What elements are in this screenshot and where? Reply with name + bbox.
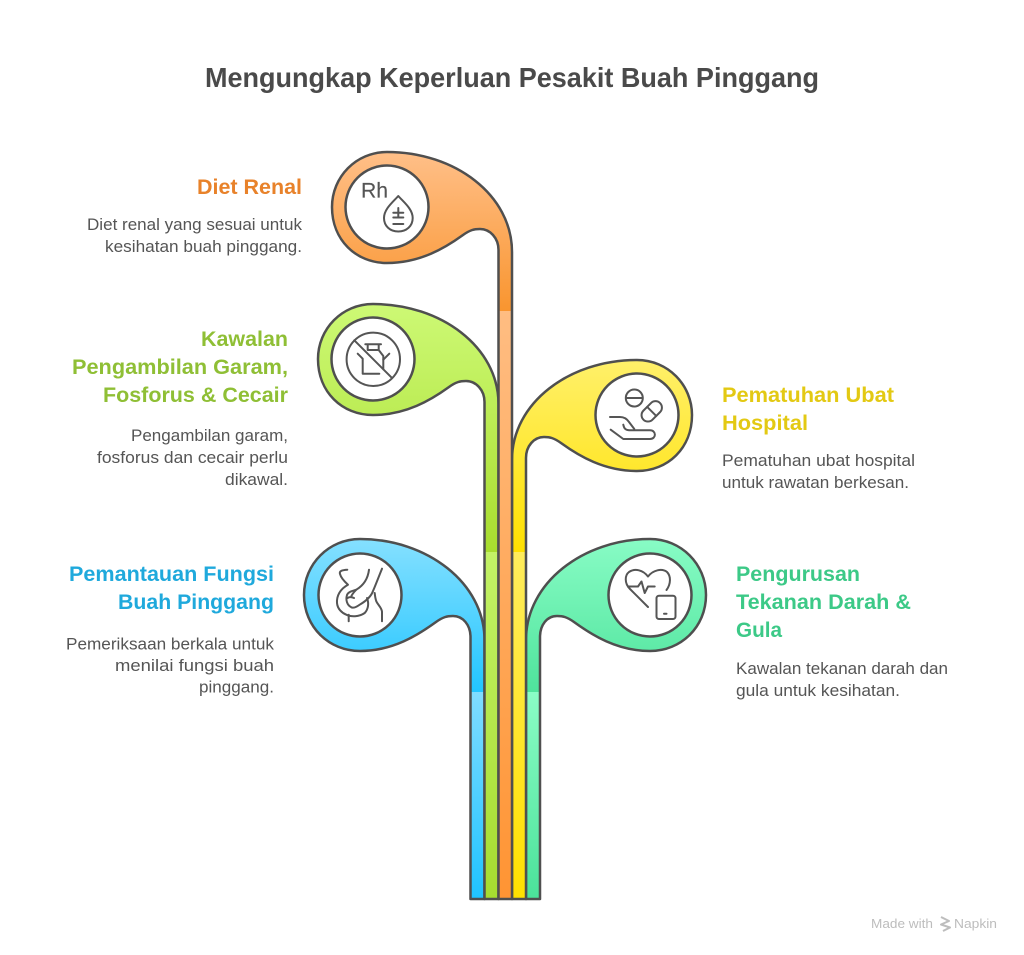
stem shape: green xyxy=(318,304,498,899)
watermark: made with napkin: Made with xyxy=(871,917,933,931)
icon: hand holding pills xyxy=(596,374,678,456)
heading xyxy=(69,563,274,614)
heading: Pengambilan Garam, xyxy=(72,356,288,379)
heading: Pengurusan xyxy=(736,563,860,586)
description: untuk rawatan berkesan. xyxy=(722,473,909,492)
description: fosforus dan cecair perlu xyxy=(97,448,288,467)
icon: crossed-out bottle xyxy=(332,318,414,400)
description: Pengambilan garam, xyxy=(131,426,288,445)
heading: Pematuhan Ubat xyxy=(722,384,894,407)
title: Mengungkap Keperluan Pesakit Buah Pinggang xyxy=(205,62,819,93)
description: Kawalan tekanan darah dan xyxy=(736,659,948,678)
panel: pengurusan tekanan darah dan gula xyxy=(526,539,948,899)
description: pinggang. xyxy=(199,678,274,696)
watermark: made with napkin xyxy=(871,917,997,931)
description xyxy=(97,426,288,489)
stem shape: yellow xyxy=(512,360,692,899)
watermark: made with napkin: Napkin xyxy=(954,917,997,931)
heading xyxy=(72,328,288,407)
description: dikawal. xyxy=(225,470,288,489)
description: menilai fungsi buah xyxy=(115,656,274,675)
panel: diet renal xyxy=(87,152,512,899)
heading: Buah Pinggang xyxy=(118,591,274,614)
description xyxy=(722,451,915,492)
heading: Pemantauan Fungsi xyxy=(69,563,274,586)
stem shape: orange xyxy=(332,152,512,899)
heading: Gula xyxy=(736,619,782,642)
heading xyxy=(722,384,894,435)
heading: Tekanan Darah & xyxy=(736,591,911,614)
panel: pemantauan fungsi buah pinggang xyxy=(66,539,484,899)
description: Pemeriksaan berkala untuk xyxy=(66,634,274,654)
description: Pematuhan ubat hospital xyxy=(722,451,915,470)
description xyxy=(736,659,948,700)
description xyxy=(87,215,302,256)
stem shape: blue xyxy=(304,539,484,899)
heading: Kawalan xyxy=(201,328,288,351)
description xyxy=(66,634,274,696)
heading xyxy=(736,563,911,642)
description: Diet renal yang sesuai untuk xyxy=(87,215,302,234)
description: kesihatan buah pinggang. xyxy=(105,237,302,256)
panel: kawalan pengambilan garam, fosforus dan cecair xyxy=(72,304,498,899)
icon: heart and device xyxy=(608,554,692,636)
description: gula untuk kesihatan. xyxy=(736,681,900,700)
icon: Rh blood drop: Rh xyxy=(361,180,388,203)
heading: Diet Renal xyxy=(197,176,302,199)
stem shape: teal xyxy=(526,539,706,899)
heading: Hospital xyxy=(722,412,808,435)
panel: pematuhan ubat hospital xyxy=(512,360,915,899)
heading: Fosforus & Cecair xyxy=(103,384,288,407)
icon: kidney and body xyxy=(318,554,402,636)
icon: Rh blood drop xyxy=(346,166,428,248)
